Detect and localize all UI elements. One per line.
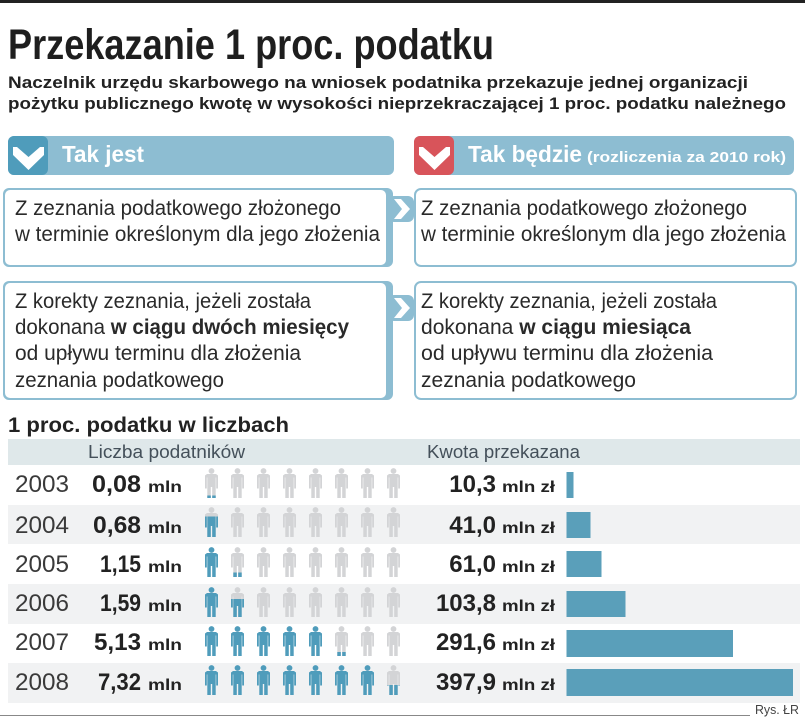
bar 2007 bbox=[566, 630, 733, 657]
heading: Tak jest: Tak jest bbox=[62, 141, 144, 167]
text: first box right bbox=[420, 197, 786, 246]
heading: statistics: 1 proc. podatku w liczbach bbox=[8, 414, 289, 437]
row: 2005: mln bbox=[148, 559, 182, 576]
row: 2008: 2008 bbox=[15, 669, 69, 696]
row: 2005: 1,15 bbox=[100, 551, 141, 578]
text: first box left bbox=[14, 197, 380, 246]
panel: Tak będzie header bbox=[414, 136, 794, 175]
heading: Tak będzie: (rozliczenia za 2010 rok) bbox=[587, 149, 786, 166]
bar 2006 bbox=[566, 591, 626, 617]
row: 2008: 7,32 bbox=[98, 669, 141, 696]
row: 2006: 1,59 bbox=[100, 590, 141, 617]
title: Przekazanie 1 proc. podatku bbox=[8, 21, 494, 69]
row: 2004: mln bbox=[148, 520, 182, 537]
text: first box right: w terminie określonym dla jego złożenia bbox=[420, 223, 786, 246]
bar 2003 bbox=[566, 472, 574, 498]
table header: Kwota przekazana bbox=[427, 442, 581, 462]
row: 2006: mln bbox=[148, 598, 182, 615]
row: 2003: mln zł bbox=[502, 479, 556, 496]
subtitle: pożytku publicznego kwotę w wysokości nieprzekraczającej 1 proc. podatku należnego bbox=[8, 94, 786, 113]
row: 2007: mln zł bbox=[502, 637, 556, 654]
row: 2005: 61,0 bbox=[449, 551, 496, 578]
text: second box left: dokonana w ciągu dwóch miesięcy bbox=[15, 316, 349, 339]
top rule bbox=[0, 0, 805, 3]
row: 2006: 103,8 bbox=[436, 590, 496, 617]
row: 2003: 10,3 bbox=[449, 471, 496, 498]
text: second box right: zeznania podatkowego bbox=[421, 369, 636, 392]
row: 2003: 2003 bbox=[15, 471, 69, 498]
panel: new rule, first box bbox=[415, 189, 796, 266]
row: 2004: mln zł bbox=[502, 520, 556, 537]
panel: new rule, second box bbox=[415, 282, 796, 399]
row: 2008: 397,9 bbox=[436, 669, 496, 696]
heading: Tak będzie: Tak będzie bbox=[468, 141, 582, 167]
row: 2004 bbox=[8, 505, 800, 544]
row: 2006: mln zł bbox=[502, 598, 556, 615]
text: first box right: Z zeznania podatkowego złożonego bbox=[421, 197, 747, 220]
text: second box left: zeznania podatkowego bbox=[15, 369, 224, 392]
table header: Liczba podatników bbox=[88, 442, 246, 462]
row: 2004: 0,68 bbox=[93, 512, 141, 539]
row: 2008: mln zł bbox=[502, 677, 556, 694]
panel: Tak jest header bbox=[8, 136, 394, 175]
row: 2004: 2004 bbox=[15, 512, 69, 539]
text: second box right bbox=[421, 290, 717, 392]
panel: current rule, second box bbox=[3, 281, 393, 400]
row: 2005: mln zł bbox=[502, 559, 556, 576]
text: second box right: Z korekty zeznania, jeżeli została bbox=[421, 290, 717, 313]
pictogram 2008 bbox=[205, 665, 400, 695]
text: second box right: dokonana w ciągu miesiąca bbox=[421, 316, 691, 339]
pictogram 2005 bbox=[205, 547, 400, 577]
row: 2005 bbox=[16, 547, 602, 577]
icon: blue check bbox=[8, 136, 48, 175]
pictogram 2003 bbox=[205, 468, 400, 498]
row: 2005: 2005 bbox=[15, 551, 69, 578]
table header bbox=[8, 439, 800, 465]
bar 2008 bbox=[566, 669, 793, 696]
text: first box left: Z zeznania podatkowego złożonego bbox=[15, 197, 341, 220]
row: 2007 bbox=[16, 626, 733, 657]
row: 2008: mln bbox=[148, 677, 182, 694]
text: second box left: od upływu terminu dla złożenia bbox=[15, 342, 301, 365]
row: 2006: 2006 bbox=[15, 590, 69, 617]
row: 2007: 5,13 bbox=[94, 629, 141, 656]
panel: current rule, first box bbox=[3, 188, 393, 267]
text: first box left: w terminie określonym dla jego złożenia bbox=[14, 223, 380, 246]
text: second box left: Z korekty zeznania, jeżeli została bbox=[15, 290, 311, 313]
row: 2008 bbox=[8, 663, 800, 703]
pictogram 2004 bbox=[205, 507, 400, 537]
icon: red check bbox=[414, 136, 454, 175]
row: 2007: mln bbox=[148, 637, 182, 654]
row: 2007: 291,6 bbox=[436, 629, 496, 656]
subtitle: Naczelnik urzędu skarbowego na wniosek podatnika przekazuje jednej organizacji bbox=[8, 73, 748, 92]
pictogram 2006 bbox=[205, 587, 400, 617]
row: 2004: 41,0 bbox=[449, 512, 496, 539]
arrow: second row bbox=[388, 295, 414, 321]
row: 2003: mln bbox=[148, 479, 182, 496]
subtitle bbox=[8, 73, 786, 113]
bar 2005 bbox=[566, 551, 602, 577]
row: 2007: 2007 bbox=[15, 629, 69, 656]
pictogram 2007 bbox=[205, 626, 400, 656]
credit: Rys. ŁR bbox=[755, 702, 799, 717]
arrow: first row bbox=[388, 196, 414, 222]
text: second box left bbox=[15, 290, 349, 392]
row: 2003: 0,08 bbox=[92, 471, 141, 498]
text: second box right: od upływu terminu dla złożenia bbox=[421, 342, 713, 365]
row: 2006 bbox=[8, 584, 800, 624]
row: 2003 bbox=[16, 468, 574, 498]
bar 2004 bbox=[566, 512, 590, 538]
